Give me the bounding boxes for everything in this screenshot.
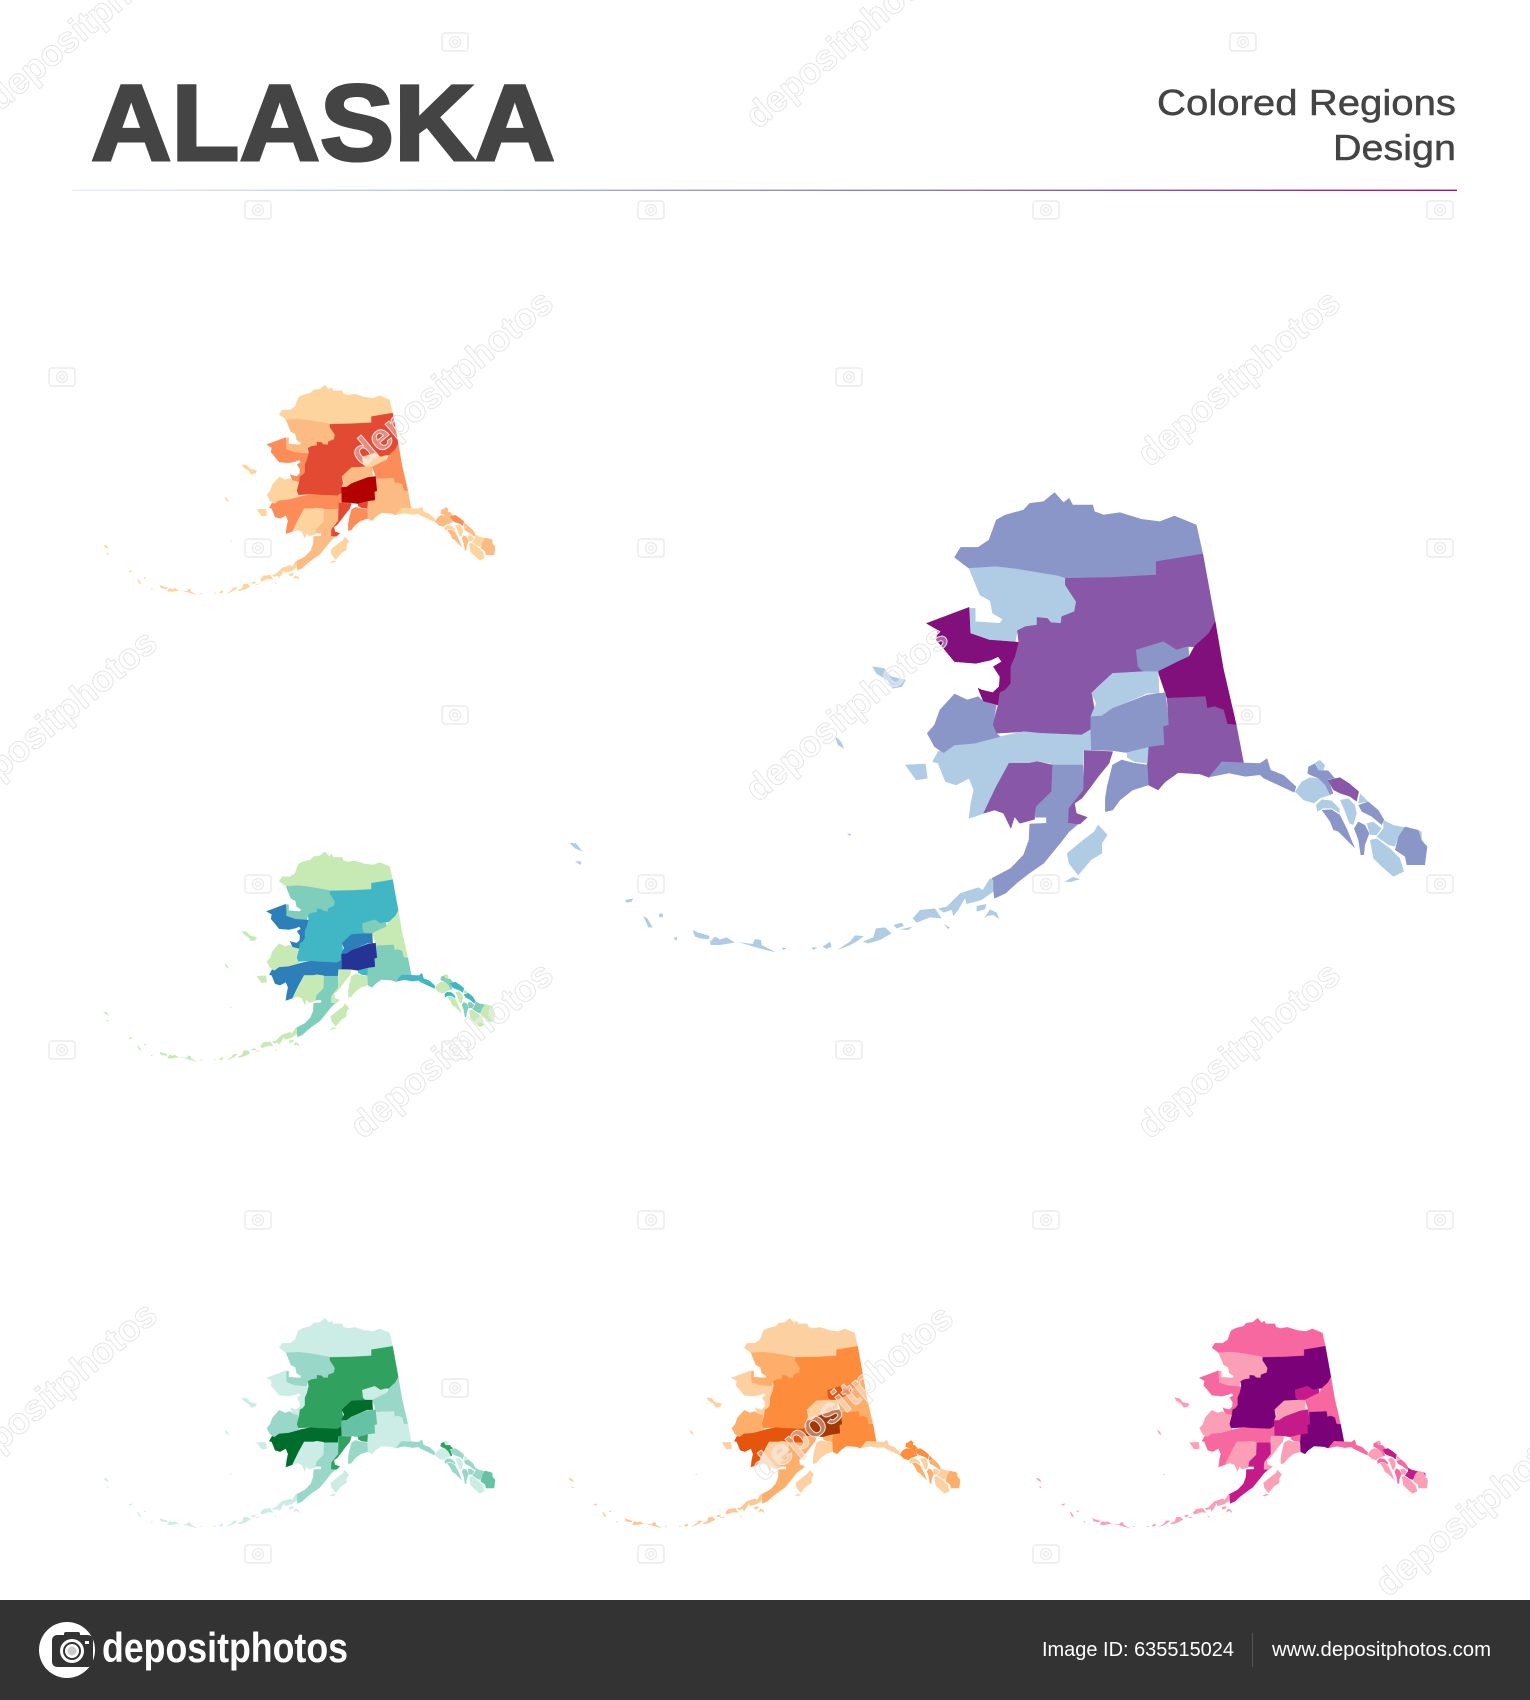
- logo wordmark: depositphotos: [102, 1624, 348, 1671]
- subtitle: [1157, 82, 1456, 168]
- footer bar: [0, 1600, 1530, 1700]
- map: large purple Alaska: [569, 493, 1427, 952]
- watermark: diagonal stock photo text: depositphotos: [1129, 281, 1348, 474]
- map: small pink Alaska: [1036, 1318, 1428, 1528]
- watermark: diagonal stock photo text: depositphotos: [1129, 953, 1348, 1146]
- map: small orange Alaska: [568, 1318, 960, 1528]
- map: small green Alaska: [103, 1318, 495, 1528]
- image id: Image ID: 635515024: [1042, 1639, 1234, 1661]
- website url: www.depositphotos.com: [1271, 1639, 1491, 1661]
- map: small red-orange Alaska: [103, 385, 495, 595]
- watermark: diagonal stock photo text: depositphotos: [742, 1296, 961, 1489]
- icon: depositphotos camera logo: [39, 1622, 95, 1678]
- map: small blue-green Alaska: [103, 852, 495, 1062]
- watermark: diagonal stock photo text: depositphotos: [737, 616, 956, 809]
- subtitle: Colored Regions: [1157, 82, 1456, 123]
- watermark: diagonal stock photo text: depositphotos: [342, 281, 561, 474]
- title: ALASKA: [91, 62, 555, 183]
- subtitle: Design: [1333, 127, 1456, 168]
- watermark: diagonal stock photo text: depositphotos: [342, 953, 561, 1146]
